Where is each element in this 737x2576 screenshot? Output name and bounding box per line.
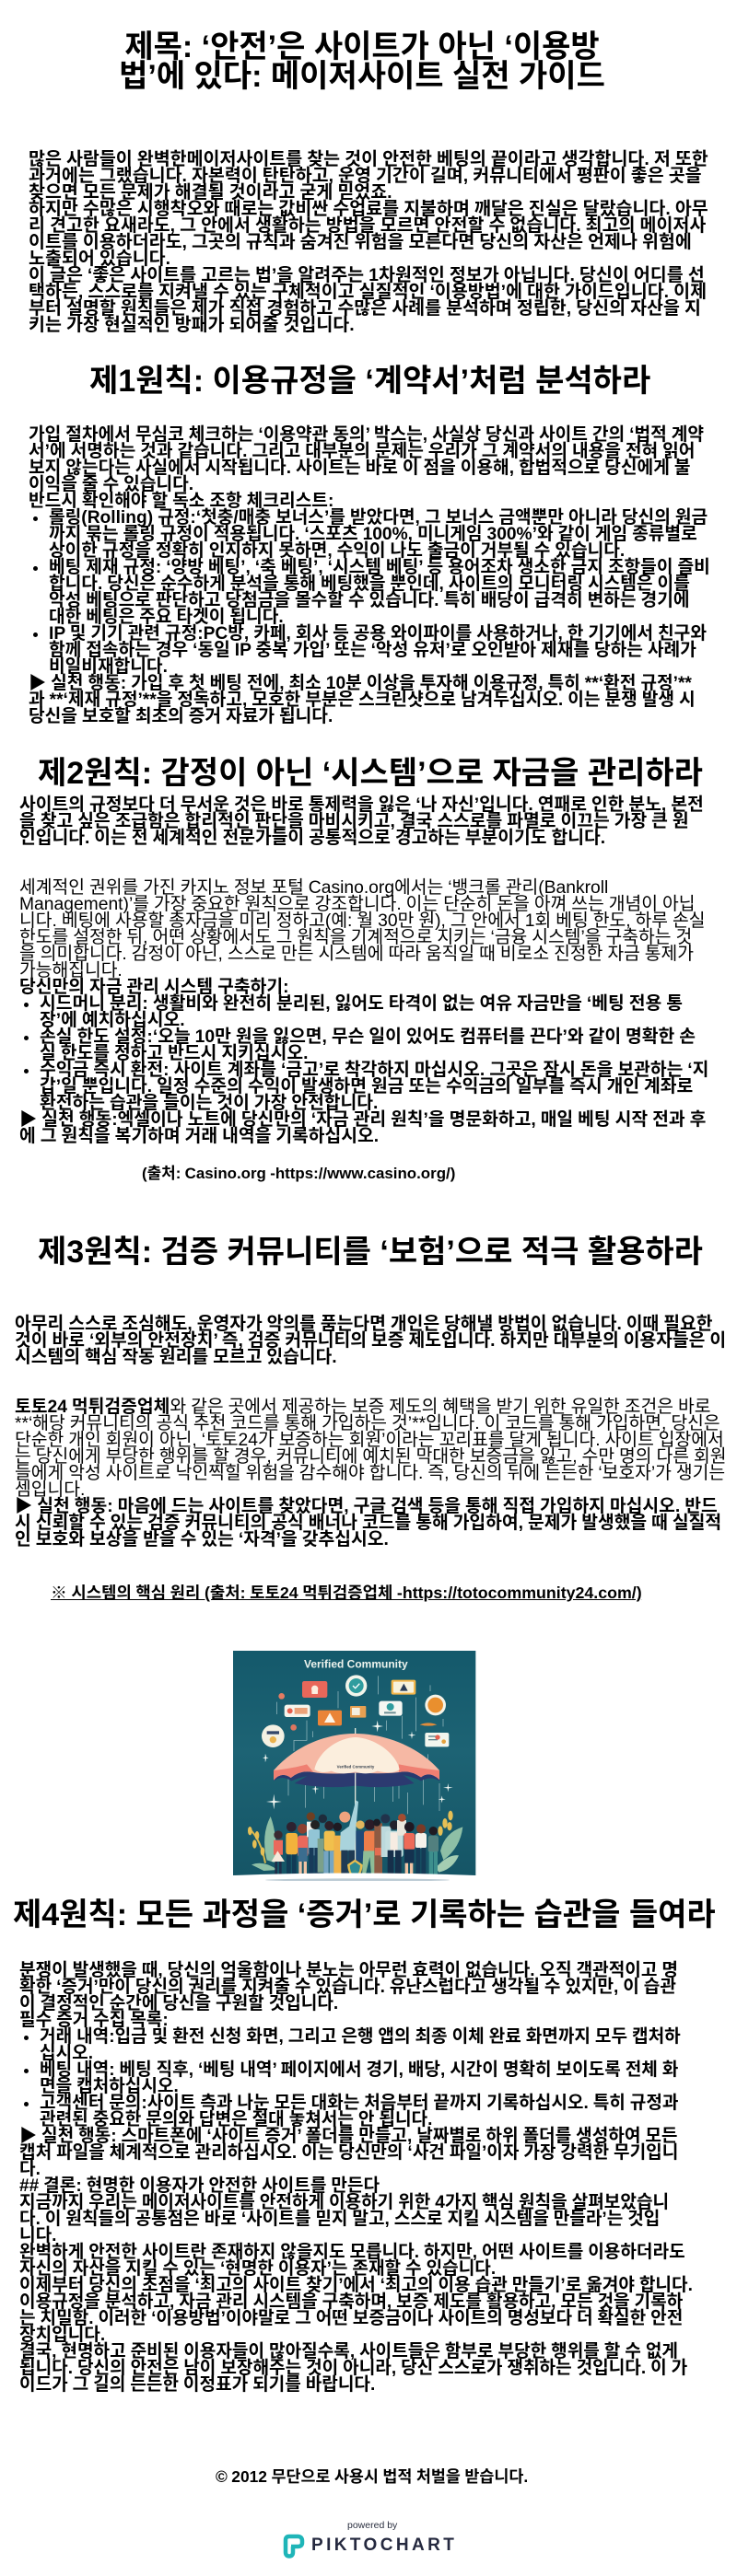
checklist: toxic clauses: 함께 접속하는 경우 ‘동일 IP 중복 가입’ 또는 ‘악성 유저’로 오인받아 제재를 당하는 사례가 [49, 641, 696, 660]
action callout: principle 1: 당신을 보호할 최초의 증거 자료가 됩니다. [29, 707, 333, 726]
checklist: toxic clauses: 대한 베팅은 주요 타겟이 됩니다. [49, 608, 284, 627]
checklist: evidence: 고객센터 문의:사이트 측과 나눈 모든 대화는 처음부터 끝까지 기록하십시오. 특히 규정과 [40, 2094, 678, 2113]
intro text block: 키는 가장 현실적인 방패가 되어줄 것입니다. [29, 315, 355, 335]
intro text block: 이 글은 ‘좋은 사이트를 고르는 법’을 알려주는 1차원적인 정보가 아닙니다. 당신이 어디를 선 [29, 265, 705, 285]
action callout: principle 3: 인 보호와 보상을 받을 수 있는 ‘자격’을 갖추십시오. [15, 1530, 389, 1549]
text block: guarantee explanation: 셈입니다. [15, 1480, 85, 1500]
checklist: evidence: 관련된 중요한 문의와 답변은 절대 놓쳐서는 안 됩니다. [40, 2110, 432, 2129]
checklist: money system [19, 978, 708, 1113]
text block: principle 4 intro: 이 결정적인 순간에 당신을 구원할 것입니다. [19, 1994, 338, 2013]
text block: principle 1 intro: 이익을 줄 수 있습니다. [29, 475, 193, 494]
text block: conclusion: 결국, 현명하고 준비된 이용자들이 많아질수록, 사이트들은 함부로 부당한 행위를 할 수 없게 [19, 2342, 678, 2361]
text block: guarantee explanation: 는 당신에게 부당한 행위를 할 경우, 커뮤니티에 예치된 막대한 보증금을 잃고, 수만 명의 다른 회원 [15, 1447, 726, 1467]
source note: Toto24: ※ 시스템의 핵심 원리 (출처: 토토24 먹튀검증업체 -https://totocommunity24.com/) [51, 1584, 642, 1602]
powered by label: powered by [347, 2520, 397, 2531]
text block: principle 3 intro [15, 1315, 726, 1367]
text block: conclusion: 는 치밀함. 이러한 ‘이용방법’이야말로 그 어떤 보증금이나 사이트의 명성보다 더 확실한 안전 [19, 2309, 683, 2328]
text block: principle 3 intro: 시스템의 핵심 작동 원리를 모르고 있습니다. [15, 1348, 337, 1367]
action callout: principle 1: ▶ 실천 행동: 가입 후 첫 베팅 전에, 최소 10분 이상을 투자해 이용규정, 특히 **‘환전 규정’** [29, 674, 692, 693]
checklist: toxic clauses: 악성 베팅으로 판단하고 당첨금을 몰수할 수 있습니다. 특히 배당이 급격히 변하는 경기에 [49, 591, 689, 610]
intro text block: 부터 설명할 원칙들은 제가 직접 경험하고 수많은 사례를 분석하며 정립한, 당신의 자산을 지 [29, 298, 701, 319]
action callout: principle 1: 과 **‘제재 규정’**을 정독하고, 모호한 부분은 스크린샷으로 남겨두십시오. 이는 분쟁 발생 시 [29, 690, 696, 710]
plants [264, 1816, 276, 1863]
text block: guarantee explanation: 들에게 악성 사이트로 낙인찍힐 위험을 감수해야 합니다. 즉, 당신의 뒤에 든든한 ‘보호자’가 생기는 [15, 1464, 725, 1483]
checklist: toxic clauses: IP 및 기기 관련 규정:PC방, 카페, 회사 등 공용 와이파이를 사용하거나, 한 기기에서 친구와 [49, 624, 707, 644]
text block: conclusion: 완벽하게 안전한 사이트란 존재하지 않을지도 모릅니다. 하지만, 어떤 사이트를 이용하더라도 [19, 2243, 685, 2262]
illustration: verified community umbrella: Verified Community [304, 1658, 408, 1671]
action callout: principle 3: ▶ 실천 행동: 마음에 드는 사이트를 찾았다면, 구글 검색 등을 통해 직접 가입하지 마십시오. 반드 [15, 1497, 718, 1516]
text block: conclusion: 이용규정을 분석하고, 자금 관리 시스템을 구축하며, 보증 제도를 활용하고, 모든 것을 기록하 [19, 2292, 683, 2312]
heading: principle 2: 제2원칙: 감정이 아닌 ‘시스템’으로 자금을 관리하라 [38, 756, 703, 791]
intro text block: 찾으면 모든 문제가 해결될 것이라고 굳게 믿었죠. [29, 182, 392, 203]
intro text block: 택하든, 스스로를 지켜낼 수 있는 구체적이고 실질적인 ‘이용방법’에 대한 가이드입니다. 이제 [29, 282, 707, 302]
text block: principle 3 intro: 것이 바로 ‘외부의 안전장치’ 즉, 검증 커뮤니티의 보증 제도입니다. 하지만 대부분의 이용자들은 이 [15, 1331, 726, 1351]
text block: conclusion: 다. 이 원칙들의 공통점은 바로 ‘사이트를 믿지 말고, 스스로 지킬 시스템을 만들라’는 것입 [19, 2210, 660, 2229]
intro text block: 리 견고한 요새라도, 그 안에서 생활하는 방법을 모르면 안전할 수 없습니다. 최고의 메이저사 [29, 215, 706, 236]
text block: bankroll management: 한도를 설정한 뒤, 어떤 상황에서도 그 원칙을 기계적으로 지키는 ‘금융 시스템’을 구축하는 것 [19, 928, 692, 947]
panel: principle 2 [19, 756, 708, 1182]
text block: conclusion: 장치입니다. [19, 2326, 105, 2345]
title [119, 29, 605, 94]
intro text block: 이트를 이용하더라도, 그곳의 규칙과 숨겨진 위험을 모른다면 당신의 자산은 언제나 위험에 [29, 232, 692, 252]
title: 법’에 있다: 메이저사이트 실전 가이드 [119, 59, 605, 94]
action callout: principle 2 [19, 1110, 706, 1146]
text block: bankroll management: 가능해집니다. [19, 961, 123, 981]
text block: conclusion: 니다. [19, 2226, 56, 2245]
text block: bankroll management: 을 의미합니다. 감정이 아닌, 스스로 만든 시스템에 따라 움직일 때 비로소 진정한 자금 통제가 [19, 945, 694, 964]
text block: bankroll management: 세계적인 권위를 가진 카지노 정보 포털 Casino.org에서는 ‘뱅크롤 관리(Bankroll [19, 878, 608, 898]
icons floating above the umbrella [302, 1681, 327, 1698]
action callout: principle 4 [19, 2127, 678, 2179]
text block: principle 4 intro: 필수 증거 수집 목록: [19, 2011, 169, 2030]
intro text block [29, 149, 708, 335]
checklist: money system: 수익금 즉시 환전: 사이트 계좌를 ‘금고’로 착각하지 마십시오. 그곳은 잠시 돈을 보관하는 ‘지 [40, 1061, 708, 1080]
checklist: toxic clauses: 합니다. 당신은 순수하게 분석을 통해 베팅했을 뿐인데, 사이트의 모니터링 시스템은 이를 [49, 574, 690, 594]
intro text block: 과거에는 그랬습니다. 자본력이 탄탄하고, 운영 기간이 길며, 커뮤니티에서 평판이 좋은 곳을 [29, 166, 702, 186]
action callout: principle 4: 다. [19, 2160, 41, 2179]
text block: conclusion: ## 결론: 현명한 이용자가 안전한 사이트를 만든다 [19, 2176, 380, 2196]
text block: conclusion: 자신의 자산을 지킬 수 있는 ‘현명한 이용자’는 존재할 수 있습니다. [19, 2259, 496, 2279]
text block: conclusion: 이드가 그 길의 든든한 이정표가 되기를 바랍니다. [19, 2375, 375, 2395]
text block: principle 1 intro [29, 425, 704, 511]
panel: principle 3 [15, 1235, 726, 1602]
text block: guarantee explanation: **‘해당 커뮤니티의 공식 추천 코드를 통해 가입하는 것’**입니다. 이 코드를 통해 가입하면, 당신은 [15, 1414, 720, 1433]
text block: principle 4 intro: 분쟁이 발생했을 때, 당신의 억울함이나 분노는 아무런 효력이 없습니다. 오직 객관적이고 명 [19, 1961, 678, 1980]
action callout: principle 3 [15, 1497, 721, 1549]
checklist: money system: 장’에 예치하십시오. [40, 1011, 185, 1030]
text block: conclusion [19, 2176, 693, 2395]
checklist: money system: 갑’일 뿐입니다. 일정 수준의 수익이 발생하면 원금 또는 수익금의 일부를 즉시 개인 계좌로 [40, 1077, 693, 1097]
crowd of people [272, 1800, 439, 1879]
text block: principle 1 intro: 서’에 서명하는 것과 같습니다. 그리고 대부분의 문제는 우리가 그 계약서의 내용을 전혀 읽어 [29, 442, 695, 461]
checklist: money system: 손실 한도 설정:‘오늘 10만 원을 잃으면, 무슨 일이 있어도 컴퓨터를 끈다’와 같이 명확한 손 [40, 1027, 696, 1047]
checklist: toxic clauses: 상이한 규정을 정확히 인지하지 못하면, 수익이 나도 출금이 거부될 수 있습니다. [49, 541, 625, 561]
checklist: evidence: 거래 내역:입금 및 환전 신청 화면, 그리고 은행 앱의 최종 이체 완료 화면까지 모두 캡처하 [40, 2027, 681, 2047]
text block: conclusion: 됩니다. 당신의 안전은 남이 보장해주는 것이 아니라, 당신 스스로가 쟁취하는 것입니다. 이 가 [19, 2359, 687, 2378]
text block: principle 1 intro: 반드시 확인해야 할 독소 조항 체크리스트: [29, 492, 333, 511]
text block: principle 1 intro: 가입 절차에서 무심코 체크하는 ‘이용약관 동의’ 박스는, 사실상 당신과 사이트 간의 ‘법적 계약 [29, 425, 704, 445]
intro text block: 하지만 수많은 시행착오와 때로는 값비싼 수업료를 지불하며 깨달은 진실은 달랐습니다. 아무 [29, 199, 708, 219]
text block: principle 2 intro: 을 찾고 싶은 조급함은 합리적인 판단을 마비시키고, 결국 스스로를 파멸로 이끄는 가장 큰 원 [19, 812, 689, 831]
checklist: money system: 실 한도를 정하고 반드시 지키십시오. [40, 1044, 308, 1063]
text block: bankroll management: Management)’를 가장 중요한 원칙으로 강조합니다. 이는 단순히 돈을 아껴 쓰는 개념이 아닙 [19, 895, 695, 914]
checklist: money system: 환전하는 습관을 들이는 것이 가장 안전합니다. [40, 1094, 378, 1113]
action callout: principle 2: ▶ 실천 행동:엑셀이나 노트에 당신만의 ‘자금 관리 원칙’을 명문화하고, 매일 베팅 시작 전과 후 [19, 1110, 706, 1130]
checklist: toxic clauses [33, 508, 710, 677]
text block: principle 4 intro: 확한 ‘증거’만이 당신의 권리를 지켜줄 수 있습니다. 유난스럽다고 생각될 수 있지만, 이 습관 [19, 1978, 676, 1997]
umbrella [354, 1728, 357, 1735]
checklist: money system: 당신만의 자금 관리 시스템 구축하기: [19, 978, 289, 997]
text block: principle 4 intro [19, 1961, 678, 2030]
heading: principle 3: 제3원칙: 검증 커뮤니티를 ‘보험’으로 적극 활용하라 [38, 1235, 703, 1270]
heading: principle 4: 제4원칙: 모든 과정을 ‘증거’로 기록하는 습관을 들여라 [13, 1897, 716, 1932]
action callout: principle 1 [29, 674, 696, 726]
icon: Piktochart mark [284, 2534, 304, 2559]
source note: Casino.org: (출처: Casino.org -https://www.casino.org/) [142, 1165, 455, 1182]
footer: copyright: © 2012 무단으로 사용시 법적 처벌을 받습니다. [216, 2467, 528, 2486]
text block: bankroll management [19, 878, 706, 981]
checklist: toxic clauses: 비일비재합니다. [49, 657, 168, 677]
text block: bankroll management: 니다. 베팅에 사용할 총자금을 미리 정하고(예: 월 30만 원), 그 안에서 1회 베팅 한도, 하루 손실 [19, 911, 706, 931]
text block: conclusion: 이제부터 당신의 초점을 ‘최고의 사이트 찾기’에서 ‘최고의 이용 습관 만들기’로 옮겨야 합니다. [19, 2276, 693, 2295]
logo wordmark: PIKTOCHART [311, 2535, 457, 2555]
footer: powered by Piktochart logo [284, 2520, 457, 2559]
action callout: principle 4: ▶ 실천 행동: 스마트폰에 ‘사이트 증거’ 폴더를 만들고, 날짜별로 하위 폴더를 생성하여 모든 [19, 2127, 677, 2146]
text block: principle 2 intro: 사이트의 규정보다 더 무서운 것은 바로 통제력을 잃은 ‘나 자신’입니다. 연패로 인한 분노, 본전 [19, 795, 704, 815]
heading: principle 1: 제1원칙: 이용규정을 ‘계약서’처럼 분석하라 [89, 364, 650, 399]
panel: principle 4 and conclusion [13, 1897, 716, 2395]
title: 제목: ‘안전’은 사이트가 아닌 ‘이용방 [124, 29, 600, 64]
text block: principle 1 intro: 보지 않는다는 사실에서 시작됩니다. 사이트는 바로 이 점을 이용해, 합법적으로 당신에게 불 [29, 458, 690, 478]
intro text block: 많은 사람들이 완벽한메이저사이트를 찾는 것이 안전한 베팅의 끝이라고 생각합니다. 저 또한 [29, 149, 708, 169]
illustration: verified community umbrella [233, 1651, 475, 1881]
text block: conclusion: 지금까지 우리는 메이저사이트를 안전하게 이용하기 위한 4가지 핵심 원칙을 살펴보았습니 [19, 2193, 669, 2212]
action callout: principle 3: 시 신뢰할 수 있는 검증 커뮤니티의 공식 배너나 코드를 통해 가입하여, 문제가 발생했을 때 실질적 [15, 1514, 721, 1533]
checklist: toxic clauses: 까지 묶는 롤링 규정이 적용됩니다. ‘스포츠 100%, 미니게임 300%’와 같이 게임 종류별로 [49, 525, 697, 544]
checklist: evidence: 면을 캡처하십시오. [40, 2077, 179, 2096]
checklist: evidence: 십시오. [40, 2044, 93, 2063]
text block: guarantee explanation [15, 1398, 726, 1500]
action callout: principle 4: 캡처 파일을 체계적으로 관리하십시오. 이는 당신만의 ‘사건 파일’이자 가장 강력한 무기입니 [19, 2143, 678, 2163]
text block: principle 3 intro: 아무리 스스로 조심해도, 운영자가 악의를 품는다면 개인은 당해낼 방법이 없습니다. 이때 필요한 [15, 1315, 713, 1334]
checklist: money system: 시드머니 분리: 생활비와 완전히 분리된, 잃어도 타격이 없는 여유 자금만을 ‘베팅 전용 통 [40, 994, 683, 1014]
text block: guarantee explanation: 단순한 개인 회원이 아닌, ‘토토24가 보증하는 회원’이라는 꼬리표를 달게 됩니다. 사이트 입장에서 [15, 1431, 724, 1450]
text block: principle 2 intro [19, 795, 704, 848]
checklist: evidence [24, 2027, 681, 2129]
intro text block: 노출되어 있습니다. [29, 249, 170, 269]
illustration: verified community umbrella: Verified Community [337, 1764, 375, 1769]
action callout: principle 2: 에 그 원칙을 복기하며 거래 내역을 기록하십시오. [19, 1127, 379, 1146]
checklist: toxic clauses: 베팅 제재 규정: ‘양방 베팅’, ‘축 베팅’, ‘시스템 베팅’ 등 용어조차 생소한 금지 조항들이 즐비 [49, 558, 710, 577]
panel: principle 1 [29, 364, 710, 726]
text block: principle 2 intro: 인입니다. 이는 전 세계적인 전문가들이 공통적으로 경고하는 부분이기도 합니다. [19, 829, 605, 848]
checklist: toxic clauses: 롤링(Rolling) 규정:‘첫충/매충 보너스’를 받았다면, 그 보너스 금액뿐만 아니라 당신의 원금 [49, 508, 708, 528]
checklist: evidence: 베팅 내역: 베팅 직후, ‘베팅 내역’ 페이지에서 경기, 배당, 시간이 명확히 보이도록 전체 화 [40, 2060, 678, 2080]
text block: guarantee explanation: 토토24 먹튀검증업체와 같은 곳에서 제공하는 보증 제도의 혜택을 받기 위한 유일한 조건은 바로 [15, 1398, 711, 1417]
